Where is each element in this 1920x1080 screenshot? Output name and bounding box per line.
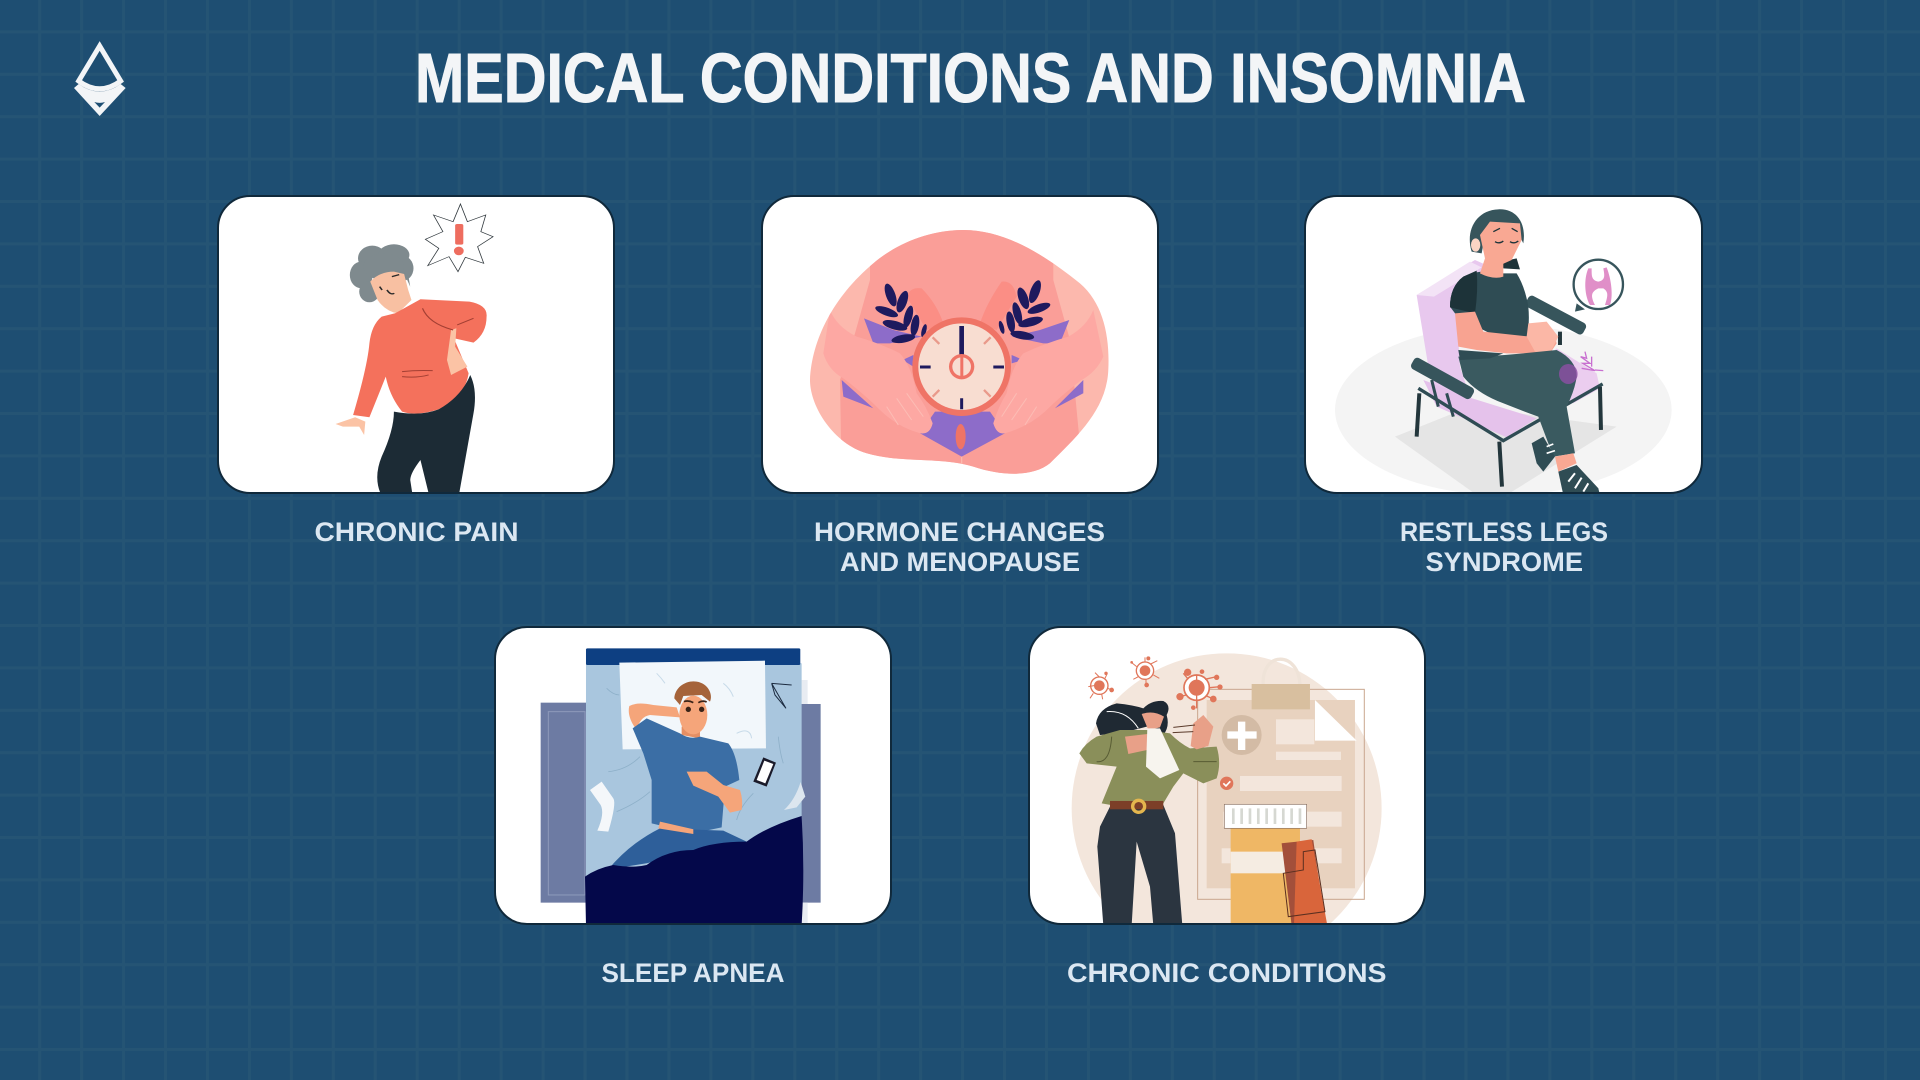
label: SLEEP APNEA	[602, 958, 784, 988]
label: HORMONE CHANGES	[814, 517, 1105, 547]
card border	[1029, 627, 1425, 924]
label line 2: SYNDROME	[1426, 547, 1583, 577]
illustration: man lying in bed	[541, 648, 821, 927]
infographic canvas	[74, 41, 1703, 982]
label: RESTLESS LEGS	[1400, 517, 1608, 547]
panel: chronic conditions	[1029, 627, 1425, 988]
label line 2: AND MENOPAUSE	[840, 547, 1080, 577]
label: CHRONIC CONDITIONS	[1067, 958, 1386, 988]
illustration: woman holding back in pain	[336, 204, 493, 493]
label: CHRONIC PAIN	[314, 517, 518, 547]
card border	[1305, 196, 1702, 493]
card border	[218, 196, 614, 493]
card border	[495, 627, 891, 924]
panel: chronic pain	[218, 196, 614, 547]
illustration: abdomen with clock	[810, 227, 1109, 480]
illustration: woman sneezing with medical chart and pills	[1072, 653, 1382, 923]
icon: logo	[74, 46, 126, 116]
illustration: person seated in chair	[1335, 209, 1672, 495]
card border	[762, 196, 1158, 493]
title: MEDICAL CONDITIONS AND INSOMNIA	[415, 39, 1526, 117]
panel: hormone changes and menopause	[762, 196, 1158, 577]
panel: sleep apnea	[495, 627, 891, 988]
panel: restless legs syndrome	[1305, 196, 1702, 577]
